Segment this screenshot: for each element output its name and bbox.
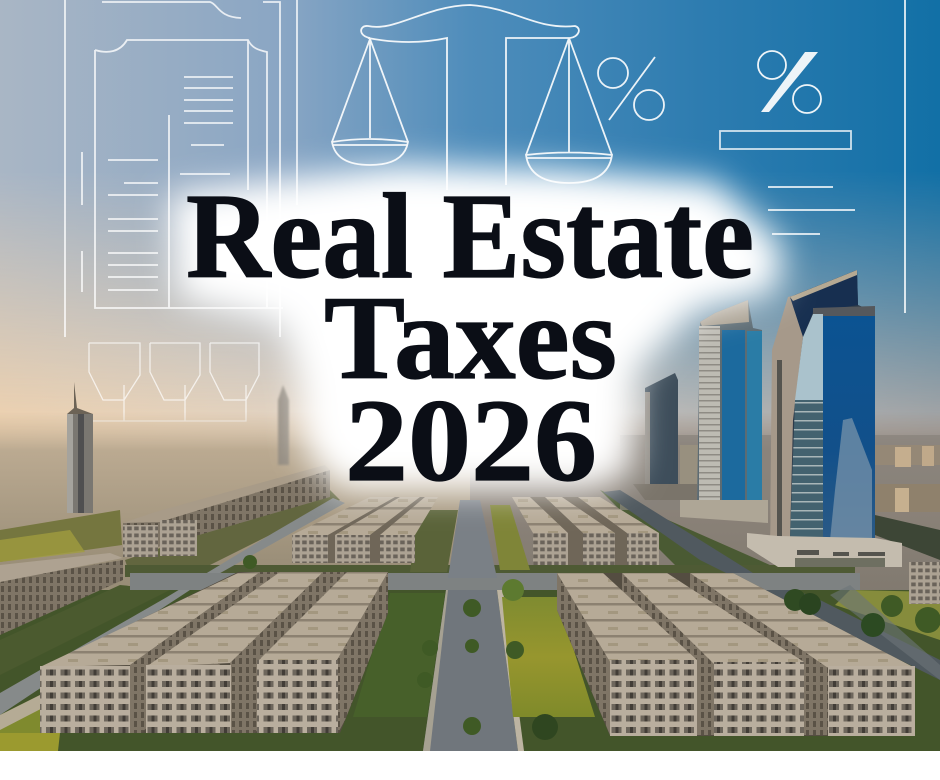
trees xyxy=(243,555,940,740)
front apartment complex shadow xyxy=(40,572,915,736)
landscape greens xyxy=(0,490,940,751)
white glow behind title xyxy=(170,165,782,490)
front apartment block left 3 xyxy=(257,572,388,733)
front apartment block left 1 xyxy=(40,572,280,733)
icon: percent sign with bar xyxy=(720,51,851,149)
front apartment block left 2 xyxy=(146,572,347,733)
front apartment block right B xyxy=(622,573,804,736)
line art: tax document xyxy=(65,0,297,337)
far left apartment row xyxy=(123,465,330,557)
small tower right xyxy=(633,373,697,500)
front apartment block right C xyxy=(690,573,915,736)
tower left xyxy=(67,382,93,513)
icon: balance scales xyxy=(332,5,612,190)
title: 2026 xyxy=(345,375,597,506)
roads xyxy=(0,490,940,751)
mid row buildings left xyxy=(292,497,438,563)
mid row buildings right xyxy=(512,497,659,565)
title: Real Estate xyxy=(186,169,754,304)
text lines and frame at right xyxy=(768,0,905,313)
mid left apartment row xyxy=(0,553,123,635)
line art: three shields xyxy=(89,343,259,421)
distant city on right xyxy=(620,435,940,560)
white bottom margin xyxy=(0,751,940,780)
large tower right xyxy=(747,270,902,567)
side building at right edge xyxy=(909,562,940,604)
sky background xyxy=(0,0,940,446)
front apartment block right A xyxy=(557,573,697,736)
title xyxy=(186,169,754,506)
icon: percent sign outlined xyxy=(598,57,664,120)
ground and haze xyxy=(0,416,940,590)
middle tower right xyxy=(680,300,768,523)
title: Taxes xyxy=(324,271,617,404)
green lawns xyxy=(353,585,940,717)
distant tower left xyxy=(278,385,289,465)
